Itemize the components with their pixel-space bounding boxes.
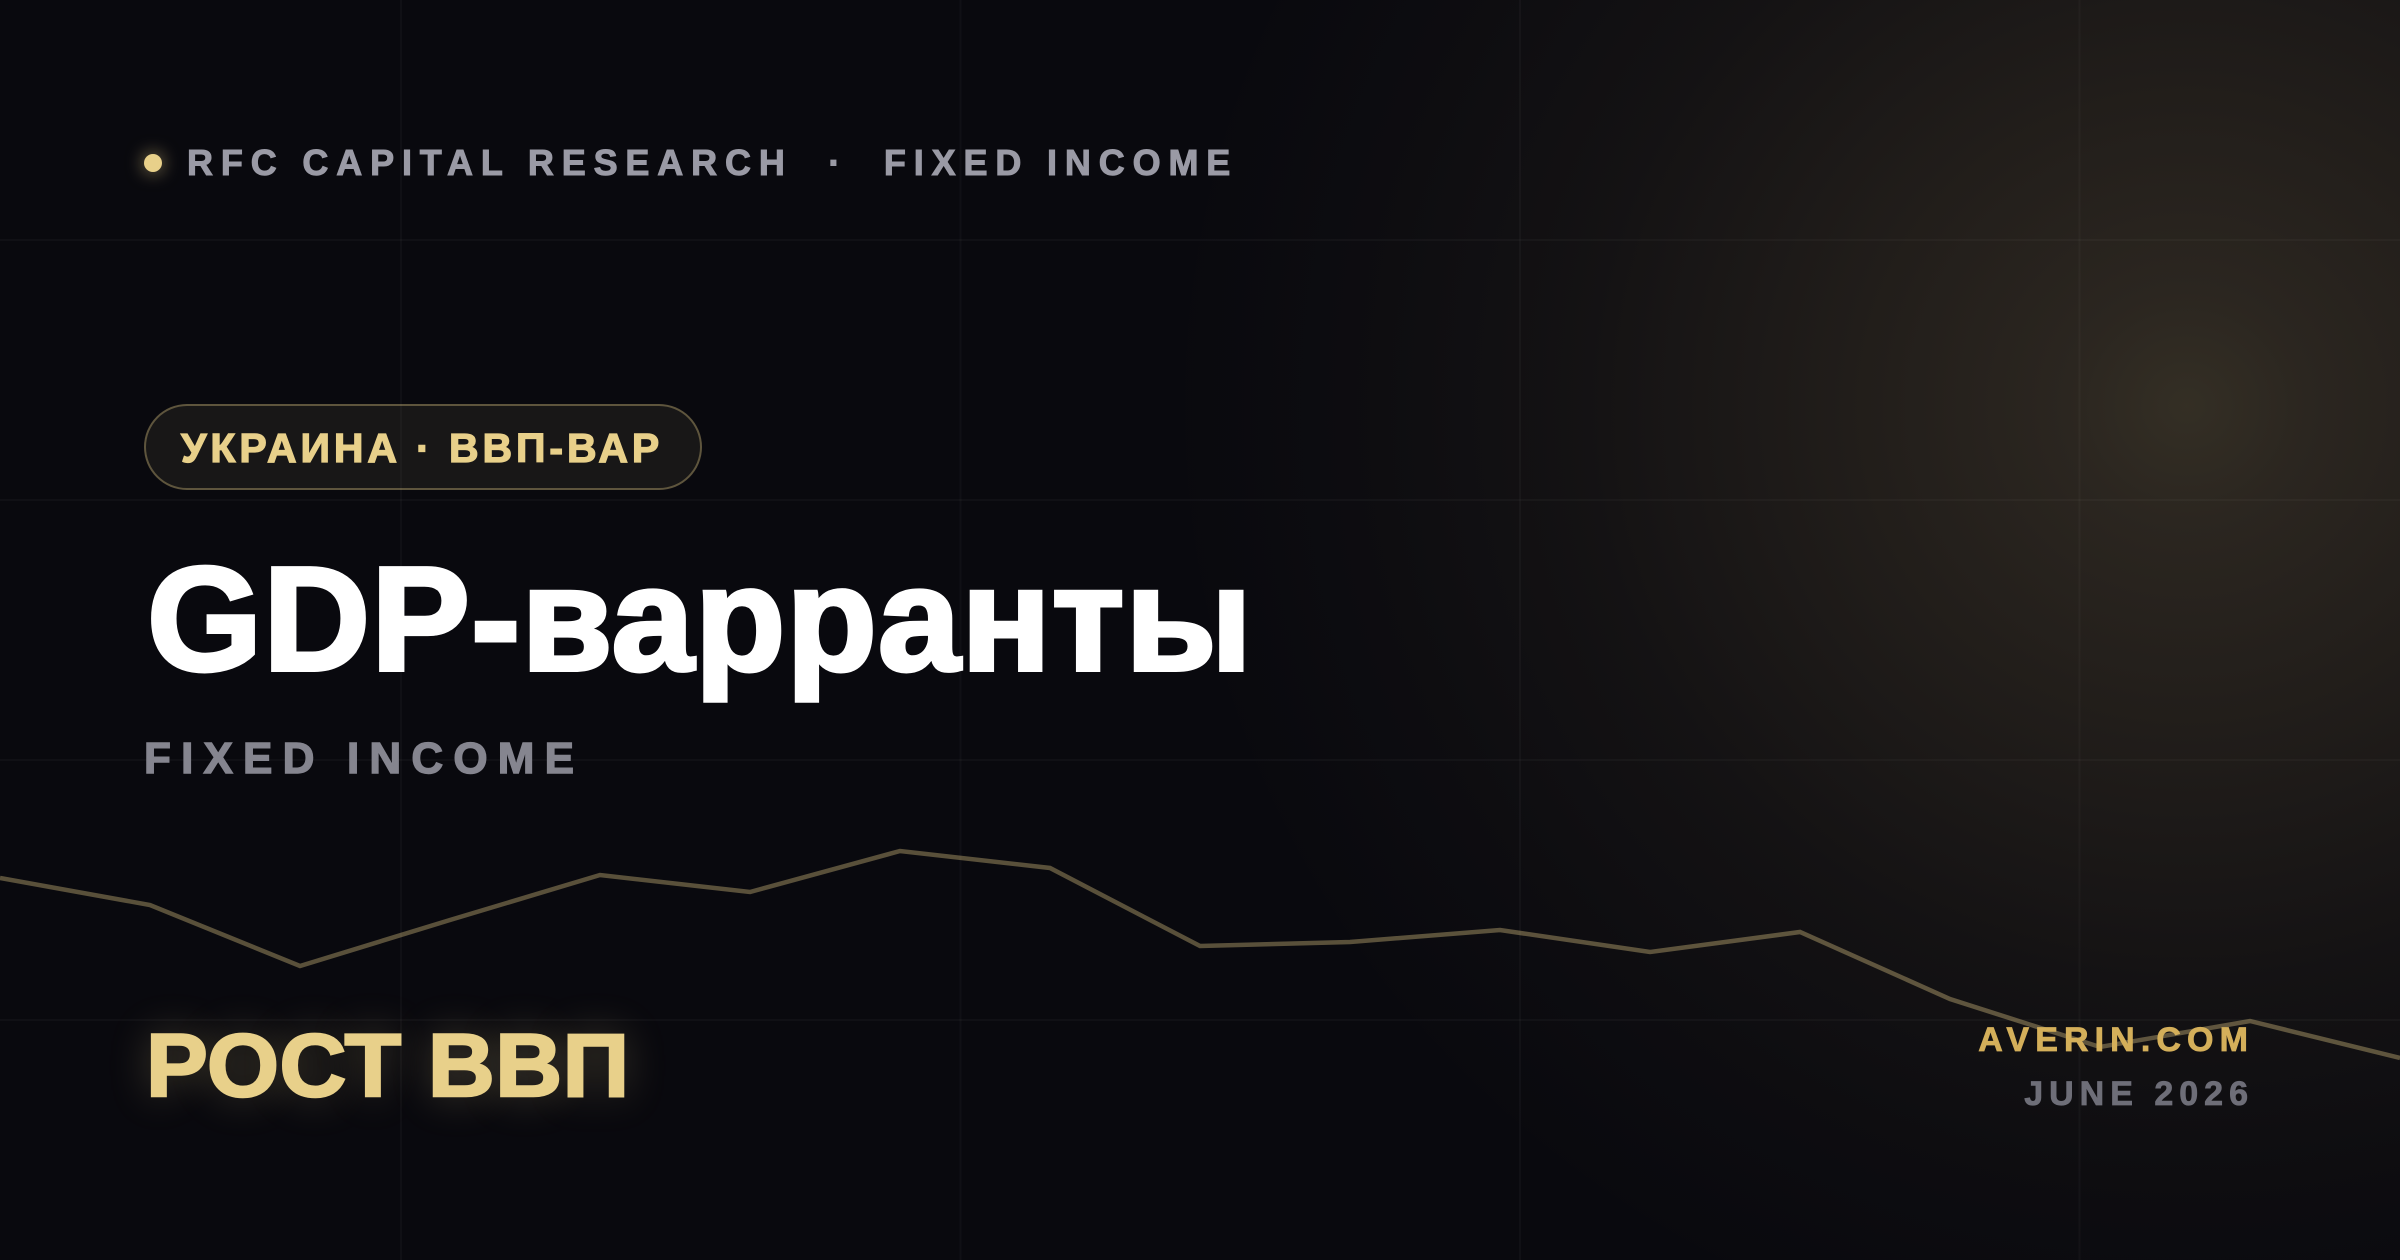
title: GDP-варранты xyxy=(147,537,1253,702)
key metric label: РОСТ ВВП xyxy=(146,1015,630,1115)
subtitle: FIXED INCOME xyxy=(144,734,584,783)
tag pill xyxy=(144,404,702,490)
icon: glowing status dot xyxy=(144,154,162,172)
pill text: УКРАИНА · ВВП-ВАР xyxy=(181,424,663,470)
footer: site and date xyxy=(1978,1021,2254,1113)
website: AVERIN.COM xyxy=(1978,1021,2254,1059)
date: JUNE 2026 xyxy=(2024,1075,2254,1113)
source label: RFC CAPITAL RESEARCH · FIXED INCOME xyxy=(187,142,1238,183)
top label row xyxy=(134,142,1238,183)
